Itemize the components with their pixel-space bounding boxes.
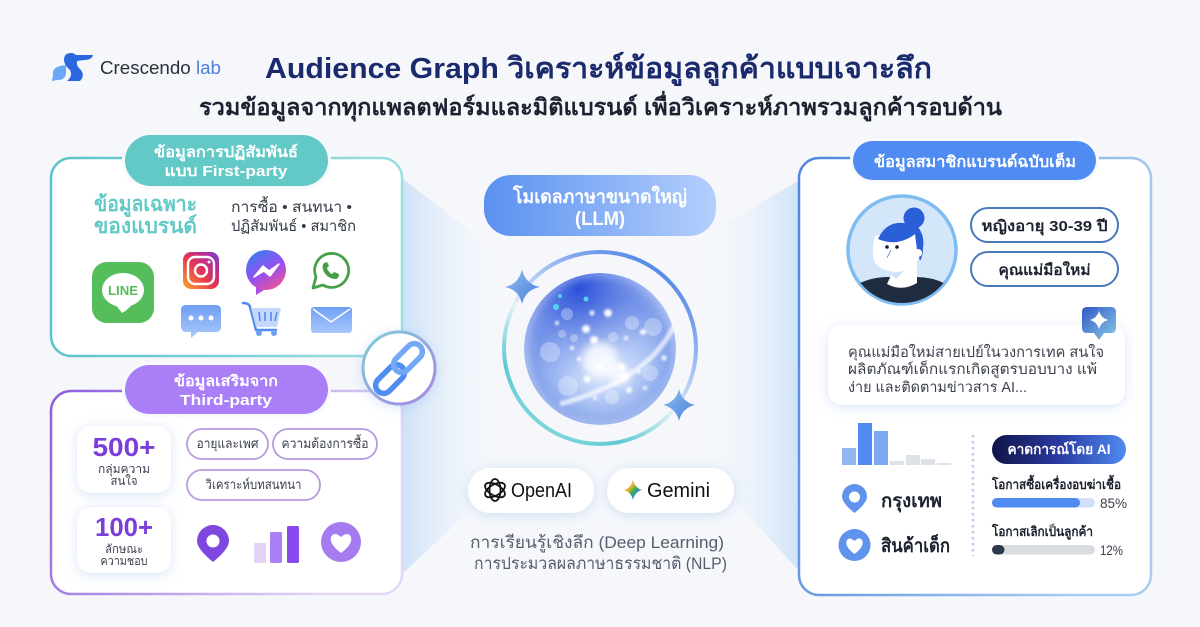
progress bar: purchase likelihood 85%: 85% (1100, 495, 1127, 511)
pill heading: member data (850, 138, 1099, 183)
logo: Crescendo lab (52, 53, 221, 81)
orb: ring and sphere (504, 252, 696, 444)
AI summary card: ผลิตภัณฑ์เด็กแรกเกิดสูตรบอบบาง แพ้ (848, 359, 1097, 378)
pill heading: first-party: ข้อมูลการปฏิสัมพันธ์ (154, 143, 298, 162)
tag: age and gender (187, 429, 268, 459)
technology caption: การประมวลผลภาษาธรรมชาติ (NLP) (474, 554, 727, 573)
tag: age and gender: อายุและเพศ (196, 436, 259, 452)
location: Bangkok: กรุงเทพ (881, 491, 942, 513)
icon: shopping cart (243, 303, 281, 336)
progress bar: purchase likelihood 85%: โอกาสซื้อเครื่องอบฆ่าเชื้อ (991, 474, 1121, 492)
AI summary card: คุณแม่มือใหม่สายเปย์ในวงการเทค สนใจ (848, 343, 1104, 361)
panel: first-party data (51, 132, 402, 356)
data type list: ปฏิสัมพันธ์ • สมาชิก (231, 218, 356, 235)
avatar (848, 196, 956, 310)
AI summary card (828, 325, 1125, 405)
badge: Gemini (607, 468, 734, 513)
technology caption (470, 533, 727, 573)
panel: third-party data (51, 362, 402, 594)
icon: bar chart purple (254, 526, 299, 563)
tag: women aged 30-39 (971, 208, 1118, 242)
star: bottom right (663, 389, 695, 421)
badge: Gemini: Gemini (647, 480, 710, 502)
tag: new mother: คุณแม่มือใหม่ (998, 261, 1090, 280)
icon: link connector (363, 332, 435, 404)
AI prediction heading: คาดการณ์โดย AI (1008, 440, 1110, 457)
progress bar: churn likelihood 12%: 12% (1100, 542, 1123, 558)
icon: WhatsApp (313, 253, 349, 288)
progress bar: churn likelihood 12% (991, 522, 1123, 558)
icon: chat bubble (181, 305, 221, 338)
AI summary card: ง่าย และติดตามข่าวสาร AI... (848, 380, 1027, 396)
icon: AI sparkle badge (1082, 307, 1116, 340)
tag: conversation analysis: วิเคราะห์บทสนทนา (205, 477, 302, 492)
pill heading: first-party (122, 132, 331, 189)
tag: purchase intent: ความต้องการซื้อ (282, 434, 368, 451)
stat card: 100+: ลักษณะ (105, 542, 143, 556)
pill heading: third-party (122, 362, 331, 417)
title: Audience Graph วิเคราะห์ข้อมูลลูกค้าแบบเจาะลึก (265, 51, 932, 86)
data type list (231, 196, 356, 235)
icon: LINE (92, 262, 154, 323)
AI prediction heading (992, 435, 1126, 464)
badge: OpenAI: OpenAI (511, 480, 572, 502)
icon: location pin purple (197, 525, 229, 562)
tag: new mother (971, 252, 1118, 286)
pill heading: first-party: แบบ First-party (164, 163, 288, 180)
brand data heading: ข้อมูลเฉพาะ (94, 192, 197, 218)
LLM heading pill: (LLM) (575, 209, 625, 230)
stat card: 500+: 500+ (92, 432, 156, 462)
icon: Messenger (246, 250, 286, 295)
badge: OpenAI (468, 468, 594, 513)
pill heading: member data: ข้อมูลสมาชิกแบรนด์ฉบับเต็ม (874, 151, 1076, 173)
progress bar: churn likelihood 12%: โอกาสเลิกเป็นลูกค้า (991, 522, 1093, 540)
pill heading: third-party: ข้อมูลเสริมจาก (174, 372, 278, 391)
stat card: 500+: สนใจ (110, 474, 138, 488)
star: top left (505, 269, 540, 304)
bar chart: member activity (842, 423, 951, 465)
panel: full brand member data (799, 138, 1151, 595)
brand data heading: ของแบรนด์ (94, 214, 197, 238)
sphere (524, 273, 676, 425)
stat card: 500+: กลุ่มความ (98, 462, 150, 477)
icon: heart purple (321, 522, 361, 562)
brand data heading (94, 192, 197, 238)
icon: LINE: LINE (108, 283, 138, 298)
tag: purchase intent (273, 429, 377, 459)
interest: baby products (838, 529, 950, 561)
subtitle: รวมข้อมูลจากทุกแพลตฟอร์มและมิติแบรนด์ เพื่อวิเคราะห์ภาพรวมลูกค้ารอบด้าน (199, 90, 1002, 122)
progress bar: purchase likelihood 85% (991, 474, 1127, 511)
LLM heading pill: โมเดลภาษาขนาดใหญ่ (512, 185, 687, 208)
stat card: 500+ (77, 426, 171, 493)
stat card: 100+ (77, 507, 171, 573)
interest: baby products: สินค้าเด็ก (881, 533, 950, 557)
tag: women aged 30-39: หญิงอายุ 30-39 ปี (982, 217, 1108, 236)
icon: Instagram (183, 252, 219, 289)
LLM heading pill (484, 175, 716, 236)
icon: mail (311, 307, 352, 333)
stat card: 100+: 100+ (95, 512, 153, 542)
stat card: 100+: ความชอบ (100, 554, 148, 568)
tag: conversation analysis (187, 470, 320, 500)
data type list: การซื้อ • สนทนา • (231, 196, 352, 216)
technology caption: การเรียนรู้เชิงลึก (Deep Learning) (470, 533, 724, 553)
logo: Crescendo lab: Crescendo lab (100, 58, 221, 78)
location: Bangkok (842, 484, 942, 513)
pill heading: third-party: Third-party (180, 392, 273, 409)
